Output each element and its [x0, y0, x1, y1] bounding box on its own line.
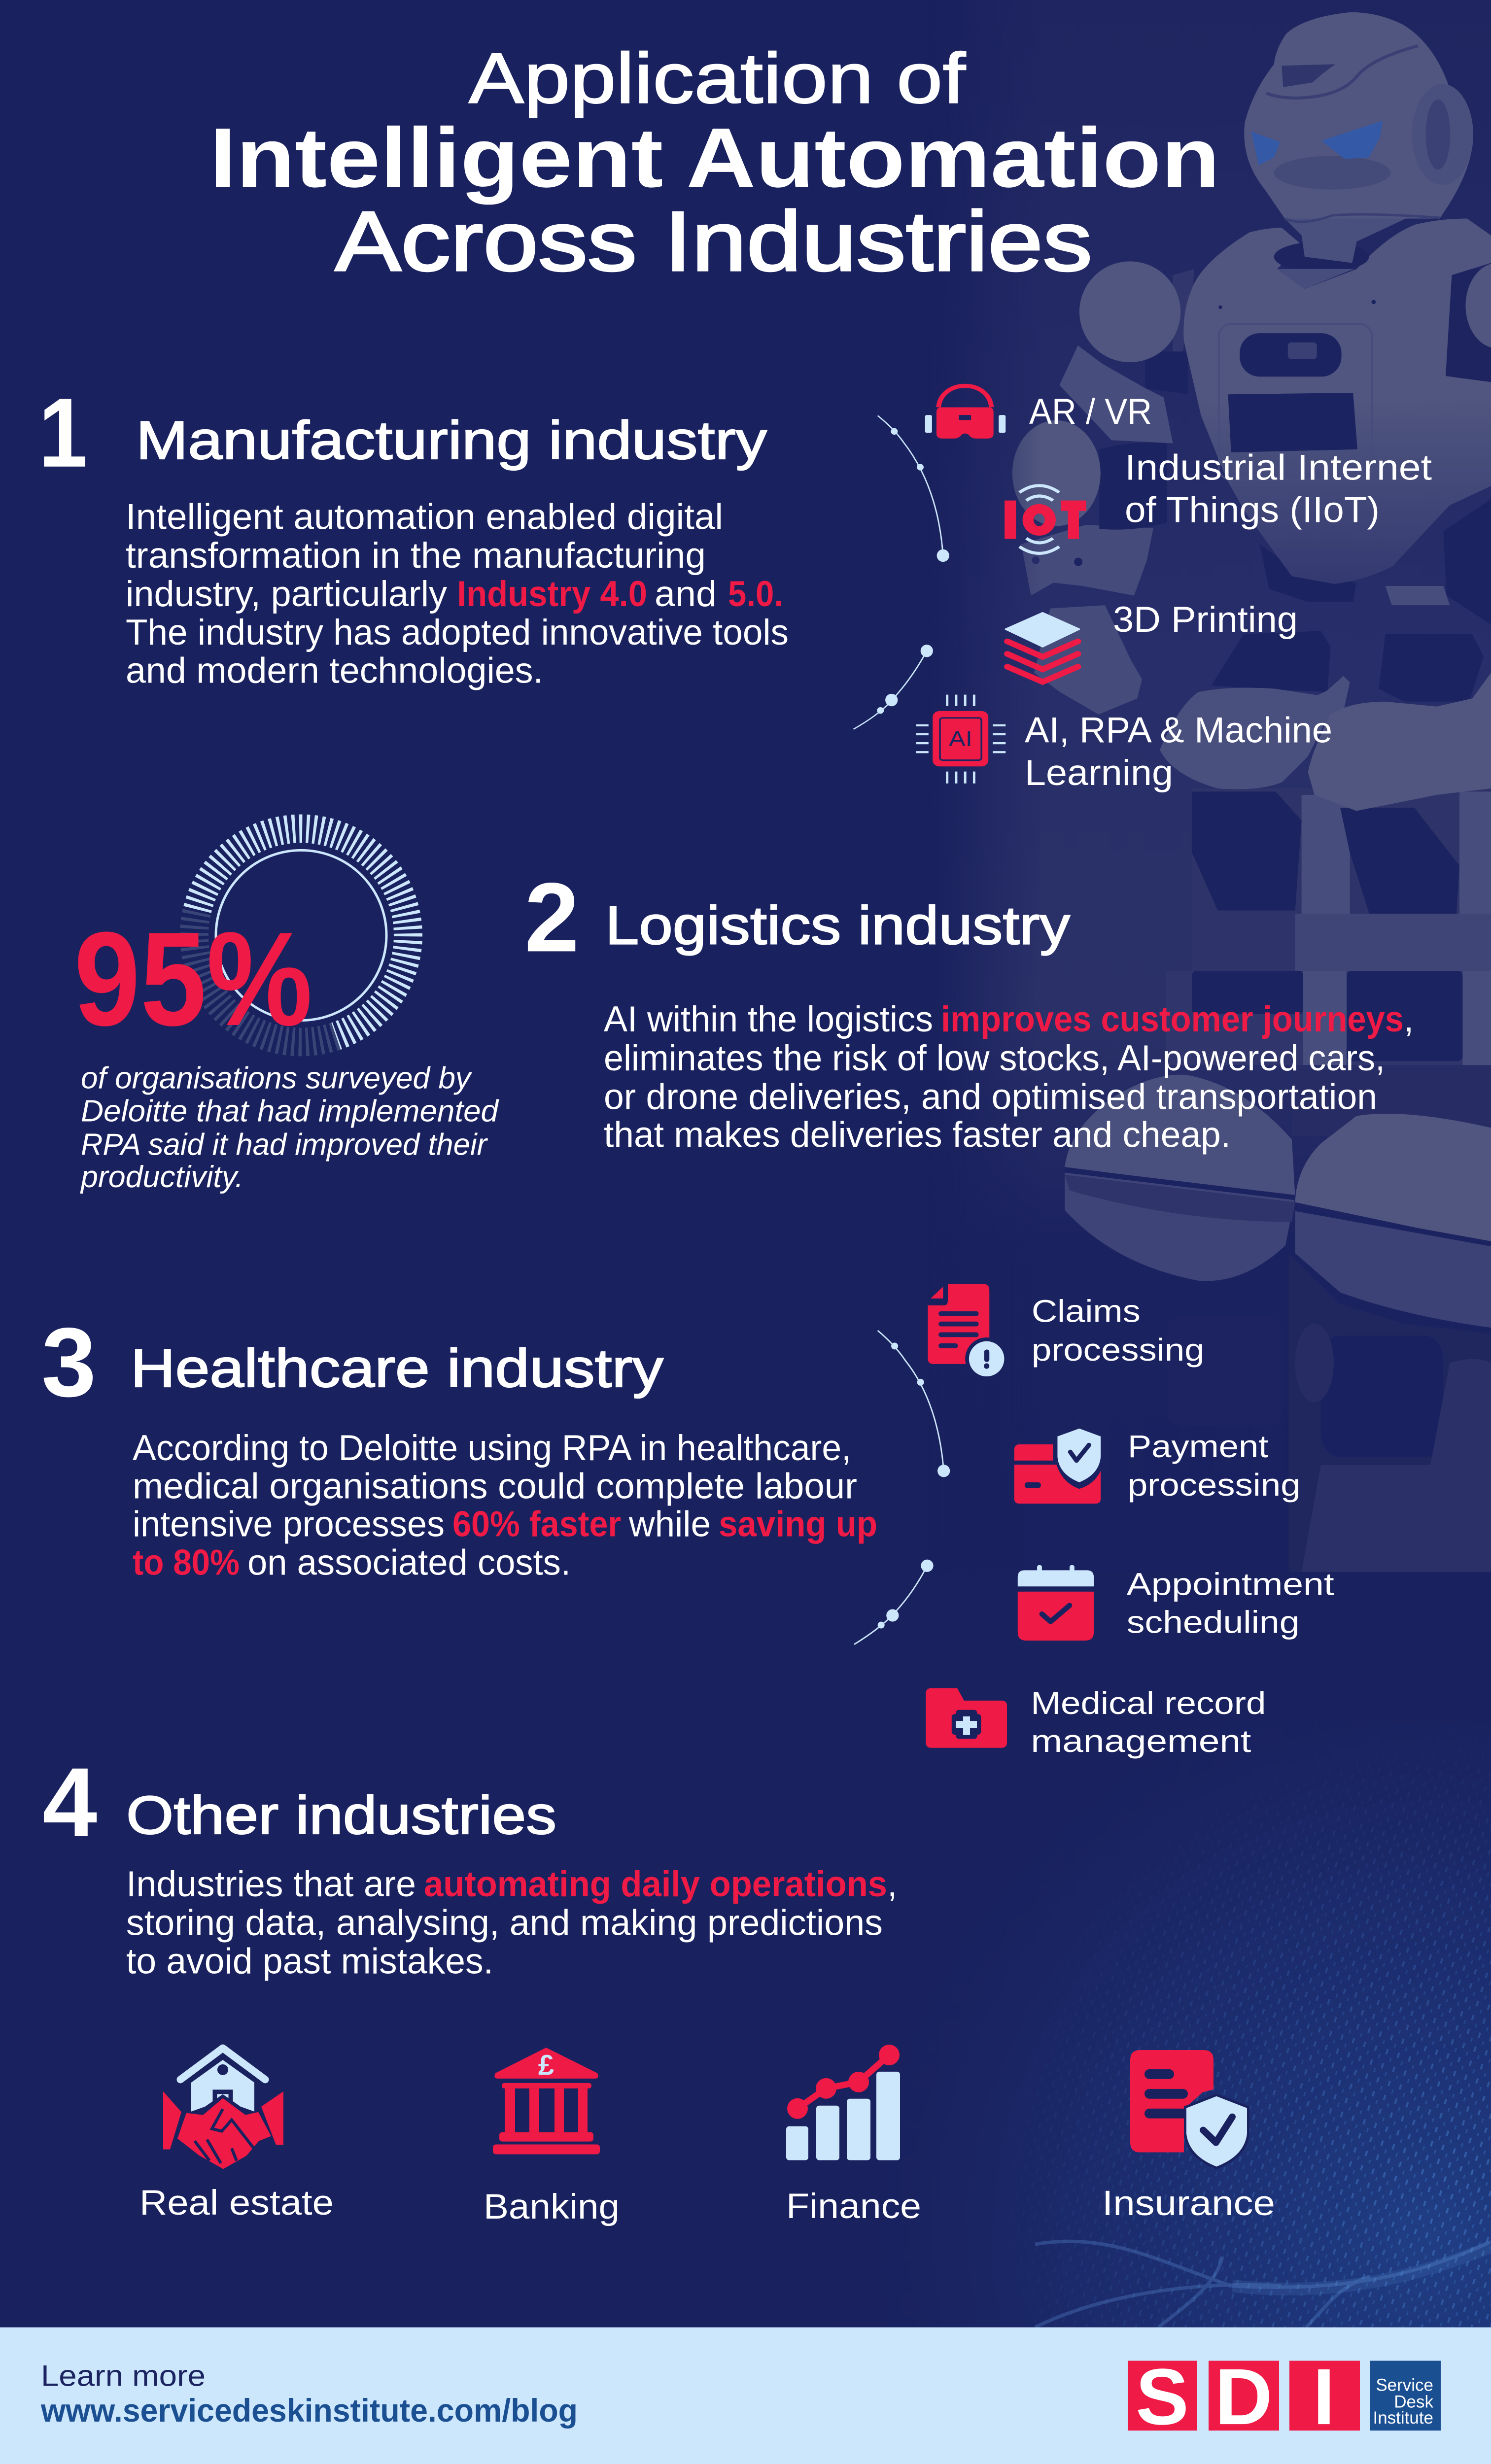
label: Industrial Internet of Things: of Things (IIoT): [1125, 490, 1380, 530]
text block: logistics description: [604, 999, 1414, 1155]
icon: medical folder: [926, 1688, 1007, 1748]
title: Application of: [469, 38, 966, 118]
logo: SDI: [1128, 2353, 1441, 2441]
arc connector upper: [878, 415, 949, 562]
text block: healthcare description: to 80%: [133, 1542, 240, 1582]
icon: calendar: [1018, 1565, 1094, 1641]
text block: statistic caption: RPA said it had improved their: [81, 1128, 488, 1162]
text block: manufacturing description: 5.0.: [728, 574, 783, 614]
text block: statistic caption: [80, 1061, 500, 1194]
icon: AI chip: AI: [949, 727, 972, 751]
label: payment processing: processing: [1128, 1467, 1301, 1503]
logo: SDI: S: [1136, 2353, 1189, 2441]
text block: manufacturing description: Intelligent automation enabled digital: [126, 497, 723, 537]
text block: other industries description: [126, 1864, 897, 1981]
panel: manufacturing technologies: [854, 386, 1432, 793]
icon: bank: £: [538, 2050, 554, 2081]
icon: insurance shield: [1130, 2050, 1247, 2166]
text block: healthcare description: saving up: [719, 1505, 877, 1544]
text block: other industries description: Industries that are: [126, 1864, 416, 1904]
robot background image: [981, 12, 1491, 1572]
arc connector lower: [854, 645, 933, 729]
label: AI, RPA and Machine Learning: [1025, 710, 1332, 793]
icon: payment card with shield: [1014, 1429, 1101, 1504]
logo: SDI: I: [1313, 2353, 1335, 2441]
text block: logistics description: that makes deliveries faster and cheap.: [604, 1115, 1231, 1155]
text block: manufacturing description: Industry 4.0: [457, 574, 647, 614]
label: medical record management: Medical record: [1031, 1685, 1266, 1721]
statistic: 95%: 95%: [74, 904, 312, 1054]
label: Industrial Internet of Things: [1125, 448, 1432, 530]
label: appointment scheduling: scheduling: [1127, 1605, 1300, 1640]
text: learn more: Learn more: [41, 2359, 206, 2392]
panel: manufacturing industry: [38, 378, 789, 691]
panel: logistics industry: [524, 863, 1414, 1155]
icon: VR headset: [925, 386, 1006, 439]
radial gauge: [194, 828, 408, 1042]
text block: healthcare description: intensive processes: [133, 1505, 445, 1544]
text block: healthcare description: medical organisations could complete labour: [133, 1467, 857, 1506]
text: website url: www.servicedeskinstitute.com/blog: [40, 2392, 578, 2429]
panel: healthcare industry: [41, 1307, 877, 1582]
icon: real estate handshake: [163, 2048, 283, 2169]
label: banking: Banking: [484, 2187, 620, 2226]
text block: healthcare description: on associated costs.: [247, 1542, 571, 1582]
footer band: [0, 2327, 1491, 2464]
logo: SDI: D: [1215, 2353, 1272, 2441]
logo: SDI: Service: [1376, 2375, 1433, 2395]
text block: manufacturing description: industry, particularly: [126, 574, 448, 614]
text block: healthcare description: [133, 1428, 877, 1582]
heading: other industries: Other industries: [126, 1785, 556, 1846]
icon: claims document: [928, 1284, 1008, 1380]
text block: healthcare description: 60% faster: [452, 1505, 621, 1544]
label: AI, RPA and Machine Learning: Learning: [1025, 753, 1173, 793]
title: Intelligent Automation: [209, 110, 1220, 205]
label: insurance: Insurance: [1102, 2184, 1275, 2223]
section number 1: 1: [38, 378, 88, 488]
label: 3D Printing: 3D Printing: [1113, 600, 1298, 640]
text block: logistics description: AI within the logistics: [604, 999, 933, 1039]
label: appointment scheduling: [1127, 1567, 1334, 1640]
label: claims processing: [1032, 1294, 1205, 1368]
text block: logistics description: eliminates the risk of low stocks, AI-powered cars,: [604, 1038, 1385, 1078]
label: real estate: Real estate: [139, 2183, 334, 2223]
section number 4: 4: [42, 1747, 97, 1857]
title: Across Industries: [335, 194, 1092, 289]
text block: logistics description: ,: [1404, 999, 1414, 1039]
title: [209, 38, 1220, 289]
text block: healthcare description: According to Deloitte using RPA in healthcare,: [133, 1428, 851, 1468]
text block: statistic caption: Deloitte that had implemented: [81, 1095, 500, 1129]
text block: manufacturing description: The industry has adopted innovative tools: [126, 613, 789, 652]
heading: manufacturing industry: Manufacturing industry: [136, 411, 767, 471]
heading: logistics industry: Logistics industry: [605, 896, 1070, 956]
label: payment processing: Payment: [1128, 1429, 1268, 1464]
icon: AI chip: [916, 695, 1006, 784]
panel: healthcare processes: [854, 1284, 1334, 1759]
text block: logistics description: improves customer journeys: [941, 999, 1404, 1039]
icon: IoT: [1005, 485, 1086, 553]
label: AR / VR: AR / VR: [1029, 392, 1152, 432]
icon: bank: [493, 2048, 600, 2155]
text block: statistic caption: of organisations surveyed by: [81, 1061, 473, 1095]
logo: SDI: Institute: [1373, 2408, 1433, 2428]
text block: healthcare description: while: [628, 1505, 711, 1544]
text block: other industries description: automating daily operations: [424, 1864, 887, 1904]
particle wave background: [999, 1756, 1491, 2327]
icon: finance chart: [786, 2045, 900, 2160]
label: appointment scheduling: Appointment: [1127, 1567, 1334, 1602]
text block: manufacturing description: transformation in the manufacturing: [126, 536, 706, 576]
label: medical record management: management: [1031, 1723, 1251, 1759]
label: finance: Finance: [786, 2187, 921, 2226]
text block: manufacturing description: and: [655, 574, 717, 614]
label: AI, RPA and Machine Learning: AI, RPA & Machine: [1025, 710, 1332, 750]
section number 3: 3: [41, 1307, 96, 1417]
text block: other industries description: storing data, analysing, and making predictions: [126, 1903, 883, 1943]
logo: SDI: Desk: [1394, 2392, 1434, 2411]
label: payment processing: [1128, 1429, 1301, 1503]
text block: manufacturing description: [126, 497, 789, 691]
panel: 95 percent statistic: [74, 828, 500, 1194]
text block: logistics description: or drone deliveries, and optimised transportation: [604, 1077, 1377, 1117]
label: claims processing: processing: [1032, 1332, 1205, 1368]
icon: 3D printing layers: [1006, 613, 1079, 682]
label: claims processing: Claims: [1032, 1294, 1141, 1329]
section number 2: 2: [524, 863, 579, 972]
panel: other industries: [42, 1747, 1275, 2226]
heading: healthcare industry: Healthcare industry: [131, 1338, 663, 1399]
label: Industrial Internet of Things: Industrial Internet: [1125, 448, 1432, 488]
arc connector lower: [854, 1560, 934, 1644]
text block: other industries description: to avoid past mistakes.: [126, 1941, 493, 1981]
text block: manufacturing description: and modern technologies.: [126, 651, 543, 691]
text block: statistic caption: productivity.: [80, 1160, 243, 1194]
icon group: technologies icons and arcs: [854, 386, 1086, 784]
text block: other industries description: ,: [887, 1864, 897, 1904]
arc connector upper: [878, 1331, 950, 1477]
label: medical record management: [1031, 1685, 1266, 1759]
